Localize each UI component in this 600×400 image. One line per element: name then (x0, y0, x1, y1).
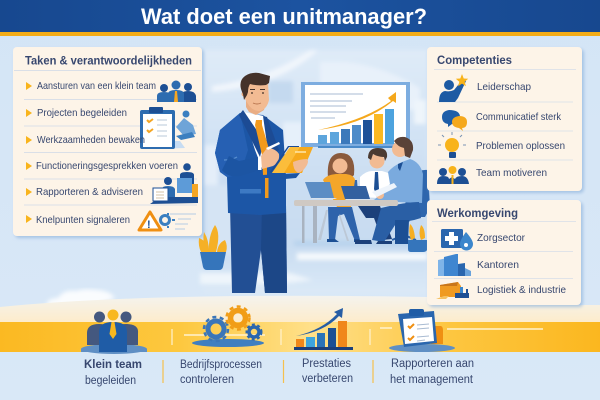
neck and face (246, 100, 266, 115)
supporting hand (293, 159, 308, 173)
caption: bedrijfsprocessen controleren: Bedrijfsprocessen (180, 359, 262, 371)
item: kantoren (438, 254, 519, 276)
item: logistiek en industrie (436, 282, 566, 299)
caption: rapporteren aan het management: het management (390, 374, 474, 386)
item: leiderschap (439, 74, 531, 102)
panel heading: Werkomgeving (437, 208, 518, 220)
panel: competenties (427, 47, 582, 191)
item: problemen oplossen: Problemen oplossen (476, 140, 565, 152)
item: leiderschap: Leiderschap (477, 81, 531, 93)
cloud (46, 289, 115, 306)
person: man in white shirt (358, 148, 398, 240)
caption: bedrijfsprocessen controleren: controleren (180, 374, 234, 386)
bar chart (318, 109, 394, 144)
hair (240, 73, 270, 100)
tie (255, 120, 269, 175)
illustration: meeting with whiteboard (294, 82, 430, 252)
meeting table (294, 200, 398, 243)
caption: rapporteren aan het management: Rapporteren aan (391, 358, 474, 370)
writing arm (222, 156, 260, 176)
caption: bedrijfsprocessen controleren (180, 359, 262, 386)
item: team motiveren (437, 166, 547, 184)
panel: taken en verantwoordelijkheden (13, 47, 202, 236)
caption: klein team begeleiden: Klein team (84, 357, 142, 371)
caption: prestaties verbeteren (302, 358, 353, 385)
task list: Rapporteren & adviseren (36, 186, 143, 198)
caption: prestaties verbeteren: verbeteren (302, 373, 353, 385)
task list: Knelpunten signaleren (36, 214, 130, 226)
plant right (408, 224, 427, 252)
icon: klein team (81, 310, 147, 354)
plant left (199, 225, 227, 270)
whiteboard (301, 82, 410, 148)
title: Wat doet een unitmanager? (141, 4, 427, 29)
panel: werkomgeving (427, 200, 581, 305)
background office scene (200, 50, 427, 293)
clipboard (272, 147, 313, 173)
task list: Aansturen van een klein team (37, 80, 156, 92)
item: team motiveren: Team motiveren (476, 167, 547, 179)
office chair (392, 170, 430, 240)
item: kantoren: Kantoren (477, 259, 519, 271)
panel heading: Competenties (437, 55, 512, 67)
item: communicatief sterk: Communicatief sterk (476, 111, 562, 123)
task list: Projecten begeleiden (37, 107, 127, 119)
jacket (215, 113, 286, 215)
trousers (230, 205, 287, 293)
item: communicatief sterk (442, 110, 562, 131)
icon: prestaties grafiek (294, 308, 353, 350)
person: man in blue shirt (355, 137, 423, 244)
icon: warning and gear (139, 212, 196, 231)
panel heading: Taken & verantwoordelijkheden (25, 56, 192, 68)
icon: tandwielen (192, 306, 264, 347)
icon: meeting (150, 163, 198, 204)
caption: klein team begeleiden: begeleiden (85, 375, 136, 387)
item: zorgsector (441, 229, 525, 251)
icon: rapport klembord (389, 309, 455, 352)
sleeve under clipboard (262, 173, 300, 180)
arrow (318, 92, 396, 130)
icon: clipboard (140, 107, 196, 149)
caption: klein team begeleiden (84, 357, 142, 387)
icon: team (157, 80, 196, 102)
bottom banner (0, 296, 600, 387)
item: zorgsector: Zorgsector (477, 232, 525, 244)
item: logistiek en industrie: Logistiek & industrie (477, 284, 566, 296)
caption: prestaties verbeteren: Prestaties (302, 358, 351, 370)
task list: Functioneringsgesprekken voeren (36, 160, 178, 172)
title banner (0, 0, 600, 36)
item: problemen oplossen (438, 132, 565, 158)
person: manager (215, 73, 313, 293)
caption: rapporteren aan het management (390, 358, 474, 386)
icon: warning and gear: ! (147, 219, 151, 231)
task list: Werkzaamheden bewaken (37, 134, 145, 146)
person: woman (318, 153, 361, 242)
laptops (305, 182, 397, 200)
collar and shirt (243, 112, 270, 168)
task list (26, 80, 178, 226)
